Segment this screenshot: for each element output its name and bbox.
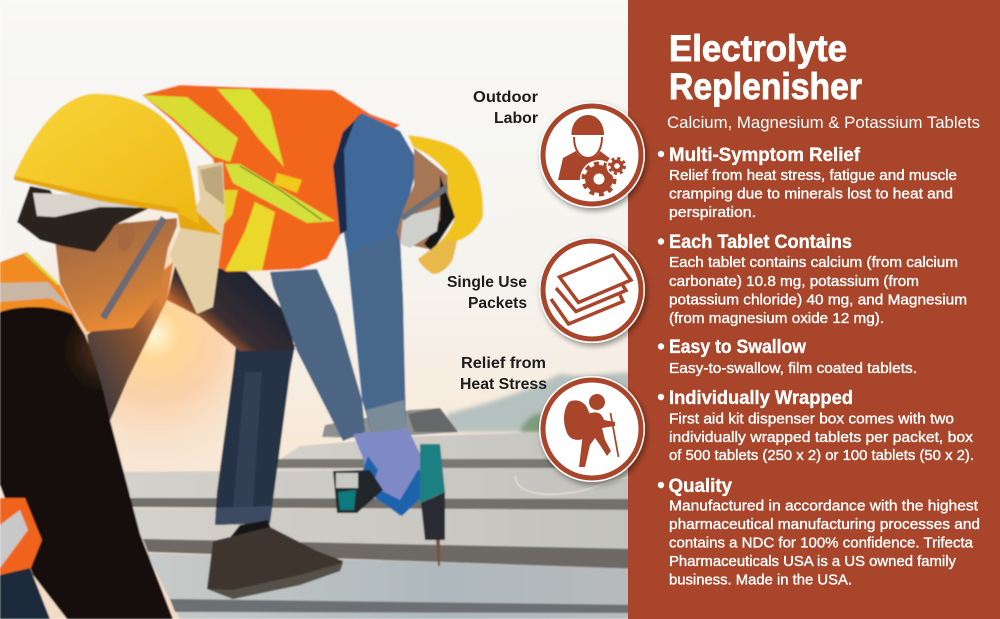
hair: [17, 186, 150, 252]
label: outdoor labor: Labor: [494, 110, 538, 127]
ear: [118, 222, 135, 252]
front jeans: [0, 568, 50, 619]
backpack: [564, 400, 591, 440]
section: individually wrapped: of 500 tablets (250 x 2) or 100 tablets (50 x 2).: [669, 448, 974, 464]
title: [669, 27, 862, 107]
loose wire: [515, 476, 640, 494]
section: each tablet contains: (from magnesium oxide 12 mg).: [669, 311, 884, 327]
icon: outdoor labor: [539, 102, 645, 208]
section: multi-symptom relief: Multi-Symptom Relief: [669, 144, 860, 166]
section: individually wrapped: [658, 387, 974, 464]
section: easy to swallow: [658, 336, 917, 377]
section: individually wrapped: individually wrapped tablets per packet, box: [669, 430, 974, 446]
rear worker head: [397, 148, 455, 250]
title: Replenisher: [669, 65, 862, 107]
far arm: [270, 269, 365, 441]
rear hard hat: [408, 135, 483, 274]
icon: packets: [539, 237, 645, 343]
section: each tablet contains: Each tablet contains calcium (from calcium: [669, 255, 958, 271]
section: multi-symptom relief: Relief from heat stress, fatigue and muscle: [669, 168, 957, 184]
section: multi-symptom relief: perspiration.: [669, 205, 756, 221]
section: quality: Manufactured in accordance with the highest: [669, 498, 978, 514]
roof slabs: [117, 430, 640, 619]
main arm: [333, 113, 418, 437]
front hard hat: [14, 94, 222, 235]
section: each tablet contains: potassium chloride) 40 mg, and Magnesium: [669, 292, 967, 308]
section: multi-symptom relief: [658, 144, 957, 221]
section: easy to swallow: Easy-to-swallow, film coated tablets.: [669, 361, 917, 377]
head cloth: [33, 193, 150, 217]
section: each tablet contains: carbonate) 10.8 mg, potassium (from: [669, 274, 919, 290]
distant hills: [445, 372, 640, 432]
vest stripes: [142, 95, 238, 162]
label: single use packets: Packets: [468, 295, 527, 312]
section: each tablet contains: [658, 231, 967, 327]
vest: [142, 85, 400, 272]
section: quality: [658, 475, 980, 588]
front vest: [0, 252, 84, 334]
label: relief from heat stress: Relief from: [461, 355, 546, 372]
icon: hiker: [539, 376, 645, 482]
section: multi-symptom relief: cramping due to minerals lost to heat and: [669, 186, 953, 202]
photo: two roofers working at sunset: [0, 0, 640, 619]
label: relief from heat stress: [460, 355, 547, 393]
pole: [610, 413, 618, 457]
section: quality: Quality: [668, 475, 732, 497]
lower leg: [215, 345, 295, 525]
rag: [170, 162, 225, 314]
small gear: [606, 156, 628, 176]
label: single use packets: Single Use: [447, 274, 527, 291]
rear worker legs: [87, 262, 173, 437]
roof debris: [322, 408, 458, 438]
label: single use packets: [447, 274, 527, 312]
section: quality: contains a NDC for 100% confidence. Trifecta: [669, 536, 974, 552]
boot: [207, 527, 343, 599]
section: individually wrapped: Individually Wrapped: [669, 387, 853, 409]
body and legs: [579, 412, 615, 467]
section: each tablet contains: Each Tablet Contains: [669, 231, 852, 253]
thigh: [167, 262, 295, 351]
chin strap: [103, 218, 164, 318]
section: easy to swallow: Easy to Swallow: [669, 336, 807, 358]
front lower vest: [0, 498, 42, 575]
torso: [558, 151, 612, 180]
section: quality: pharmaceutical manufacturing processes and: [669, 517, 980, 533]
front worker body: [0, 306, 173, 619]
green bush: [520, 414, 552, 432]
subtitle: Calcium, Magnesium & Potassium Tablets: [667, 114, 980, 132]
title: Electrolyte: [669, 27, 847, 69]
helmet: [571, 115, 604, 135]
large gear: [580, 160, 618, 198]
label: outdoor labor: Outdoor: [473, 89, 538, 106]
sock: [228, 520, 272, 548]
section: quality: Pharmaceuticals USA is a US owned family: [669, 554, 957, 570]
label: outdoor labor: [473, 89, 538, 127]
label: relief from heat stress: Heat Stress: [460, 376, 547, 393]
right panel: [628, 0, 1000, 619]
section: individually wrapped: First aid kit dispenser box comes with two: [669, 412, 954, 428]
front neck and face: [55, 218, 177, 332]
drill: [333, 444, 445, 566]
face: [574, 137, 602, 158]
glove: [353, 429, 427, 516]
head: [589, 394, 605, 410]
section: quality: business. Made in the USA.: [669, 572, 852, 588]
